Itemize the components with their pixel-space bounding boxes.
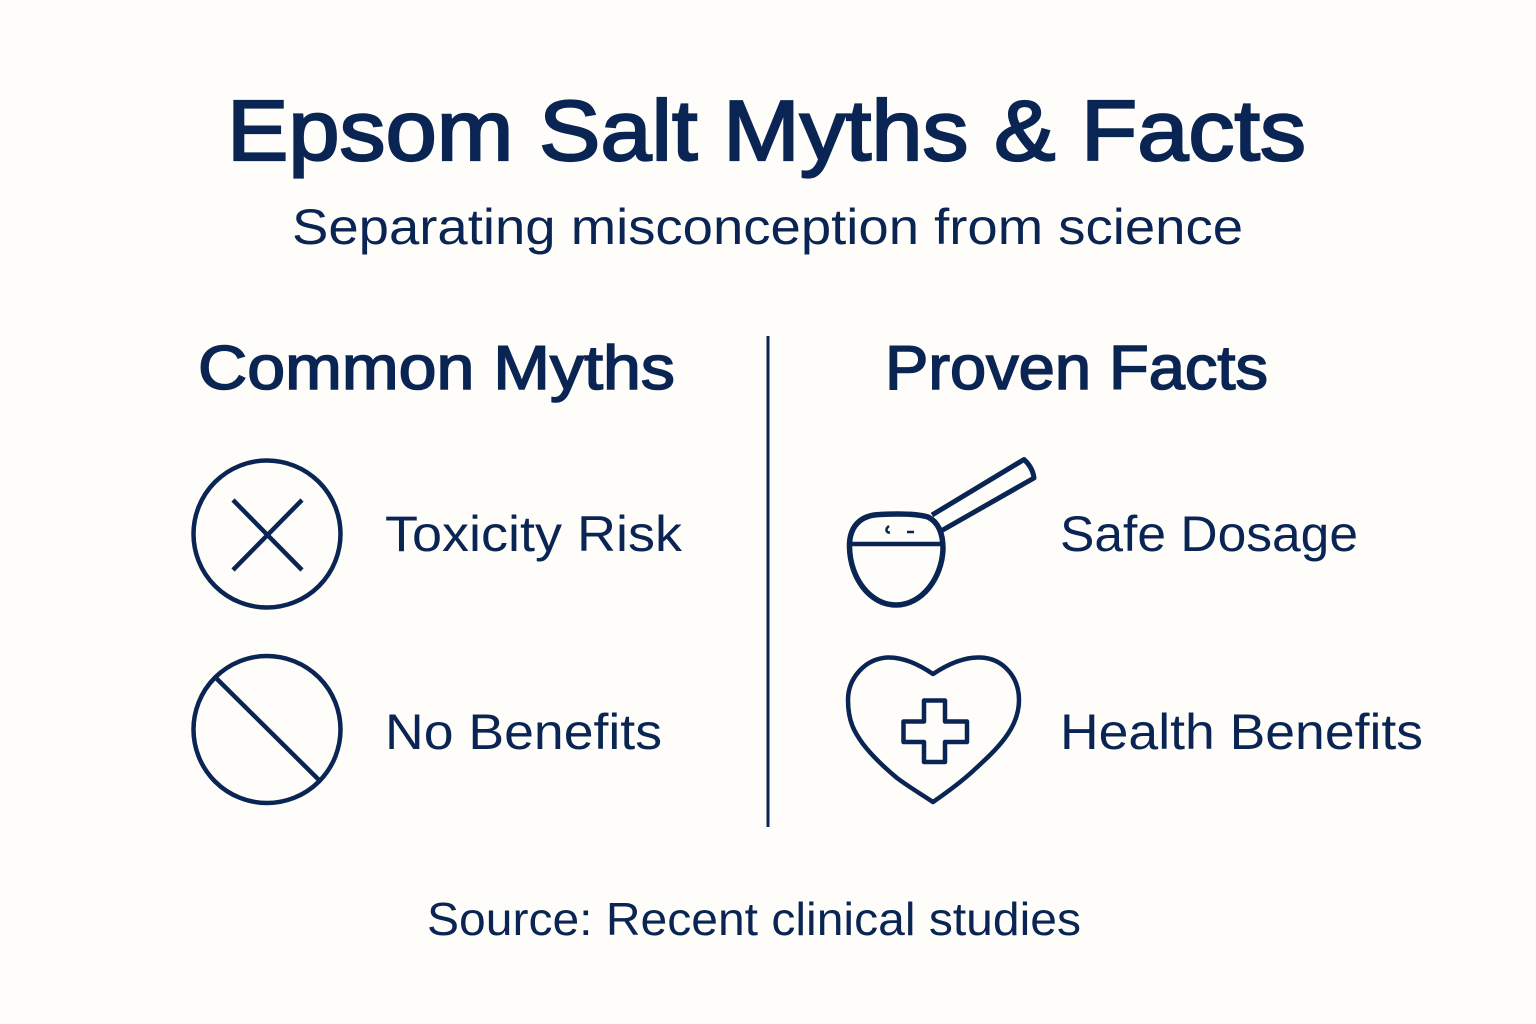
- panel: common myths: [194, 334, 683, 803]
- heading: proven facts: Proven Facts: [885, 334, 1268, 403]
- title: Epsom Salt Myths & Facts: [227, 84, 1306, 179]
- label: no benefits: No Benefits: [385, 704, 662, 760]
- label: safe dosage: Safe Dosage: [1060, 506, 1358, 562]
- panel: proven facts: [848, 334, 1423, 802]
- heading: common myths: Common Myths: [198, 334, 675, 403]
- label: health benefits: Health Benefits: [1060, 704, 1423, 760]
- subtitle: Separating misconception from science: [292, 199, 1243, 255]
- icon: circled x: [194, 460, 340, 608]
- icon: measuring scoop: [849, 460, 1034, 605]
- icon: prohibition circle: [194, 656, 340, 803]
- icon: heart with medical cross: [848, 657, 1019, 802]
- center divider: [766, 336, 770, 827]
- source note: Source: Recent clinical studies: [427, 893, 1081, 945]
- label: toxicity risk: Toxicity Risk: [385, 506, 683, 562]
